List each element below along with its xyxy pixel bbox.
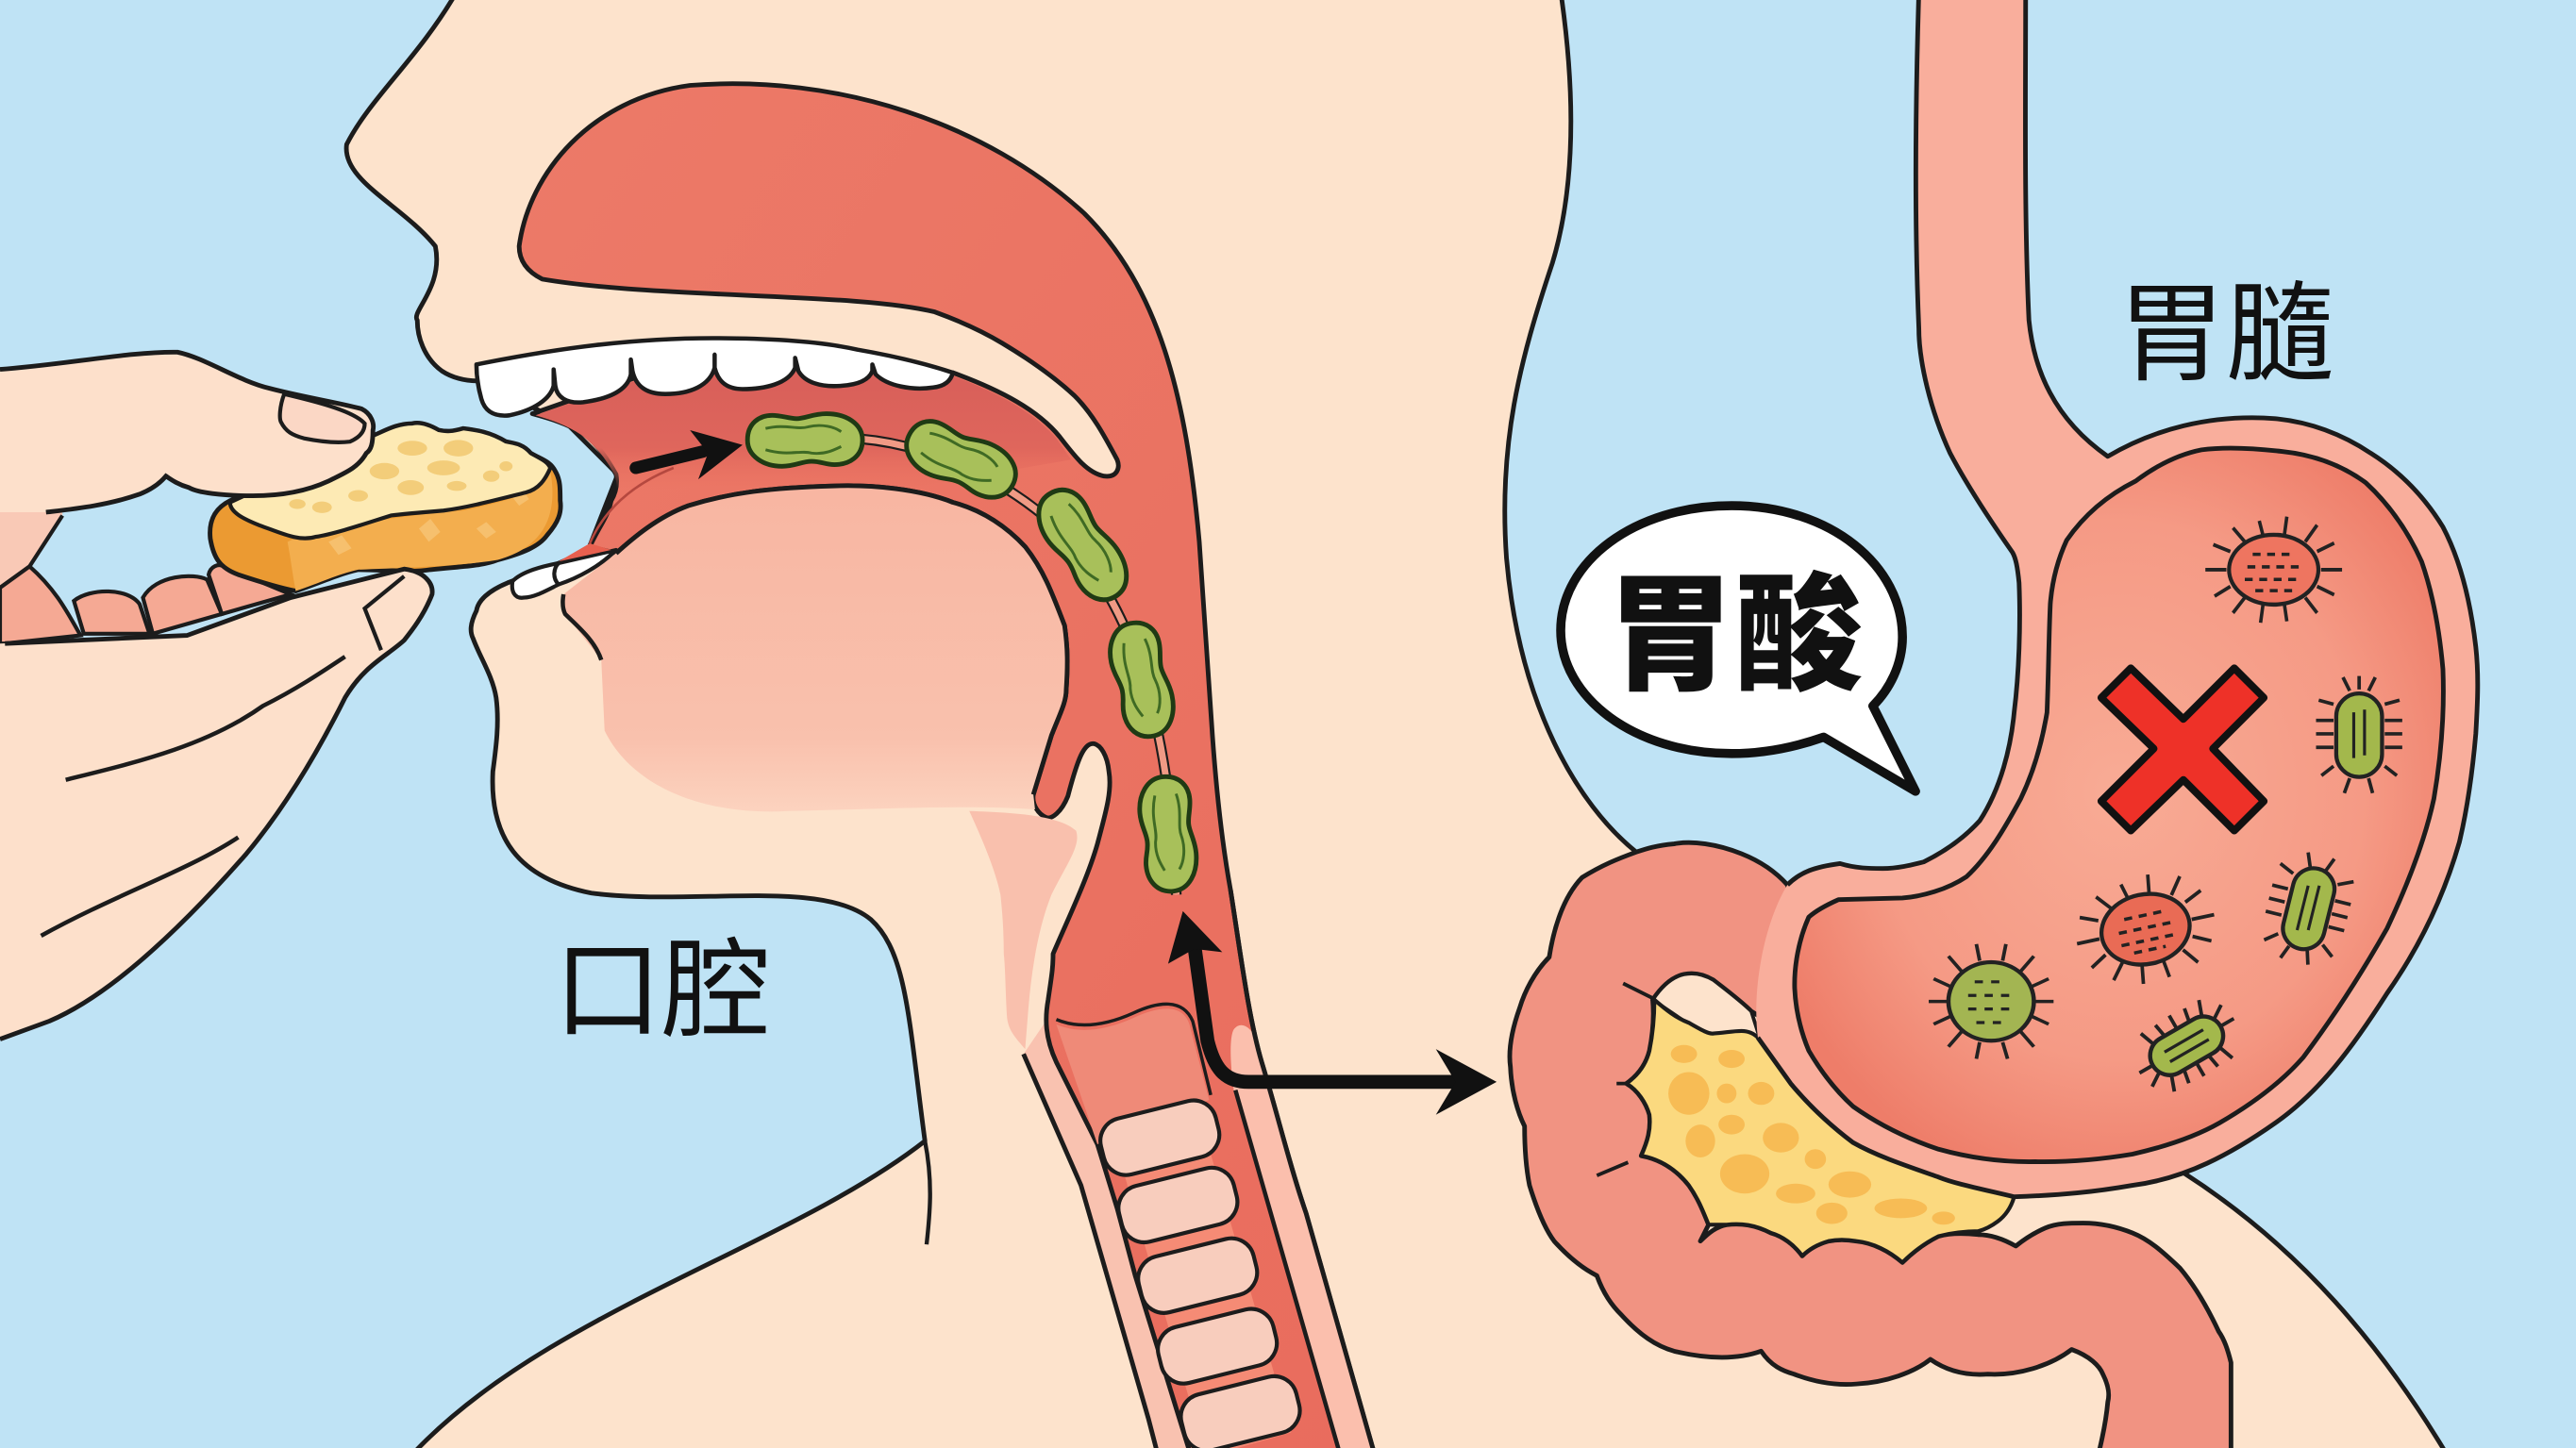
throat pink patch [969, 811, 1078, 1049]
thumb outline [0, 569, 432, 1040]
arrow: from throat to stomach [1168, 911, 1497, 1115]
index finger outline [0, 352, 374, 512]
label: 口腔: 口腔 [554, 930, 771, 1051]
icon: green bacterium bottom [2122, 989, 2251, 1103]
biscuit [210, 423, 560, 591]
mouth darker roof [536, 357, 1071, 535]
palm creases [42, 657, 345, 936]
callout: speech bubble: 胃酸 [1607, 564, 1863, 707]
intestine [1510, 842, 2231, 1448]
stomach lining [1795, 448, 2443, 1162]
bolus inner lines [765, 425, 1186, 871]
panel: hand holding biscuit [0, 352, 560, 1040]
palm shade [0, 501, 62, 588]
gap behind pancreas [1653, 974, 1761, 1042]
thumb crease [365, 576, 404, 650]
bolus pieces [747, 412, 1199, 893]
stomach wall fill [1756, 0, 2478, 1197]
label: 胃膸: 胃膸 [2117, 274, 2334, 394]
icon: red cross [2101, 668, 2264, 831]
icon: green bacterium lower right [2255, 846, 2361, 972]
neck crease line [925, 1141, 930, 1244]
index finger [0, 352, 374, 512]
tongue [563, 486, 1067, 811]
inner lip line [562, 594, 601, 660]
intestine folds [1597, 983, 1653, 1175]
icon: green bacterium right [2316, 676, 2402, 793]
esophagus inner line [1235, 1090, 1341, 1448]
icon: red bacterium centre [2066, 863, 2225, 995]
tongue outline [616, 486, 1067, 794]
ring backing [1160, 1138, 1248, 1445]
stomach wall outline upper [1758, 0, 2478, 1197]
fingernail [280, 394, 365, 442]
palm shade outline [0, 515, 62, 588]
pancreas spots [1668, 1045, 1955, 1224]
back fingers [0, 565, 291, 643]
pale trachea sheath [1024, 1018, 1191, 1448]
icon: red bacterium top [2205, 517, 2342, 623]
trachea cap line [1057, 1004, 1211, 1095]
mouth inner crease [590, 468, 674, 543]
pancreas [1627, 1000, 2015, 1262]
lower teeth [512, 550, 616, 598]
food bolus path [747, 412, 1199, 894]
thumb and palm [0, 569, 432, 1040]
esophagus outer line [1230, 890, 1375, 1448]
lower gum sliver [559, 543, 611, 561]
upper teeth [477, 339, 953, 416]
panel: trachea [1057, 1004, 1305, 1448]
pale strip beside esophagus [1230, 1025, 1375, 1448]
panel: throat and nasal cavity [519, 84, 1375, 1448]
icon: round green bacterium [1929, 944, 2053, 1058]
sheath outline [1024, 1054, 1158, 1448]
cartilage rings [1096, 1095, 1305, 1448]
panel: stomach and intestine [1510, 0, 2478, 1448]
arrow: into mouth [636, 430, 743, 479]
callout: speech bubble [1561, 506, 1915, 791]
trachea interior [1057, 1008, 1209, 1144]
